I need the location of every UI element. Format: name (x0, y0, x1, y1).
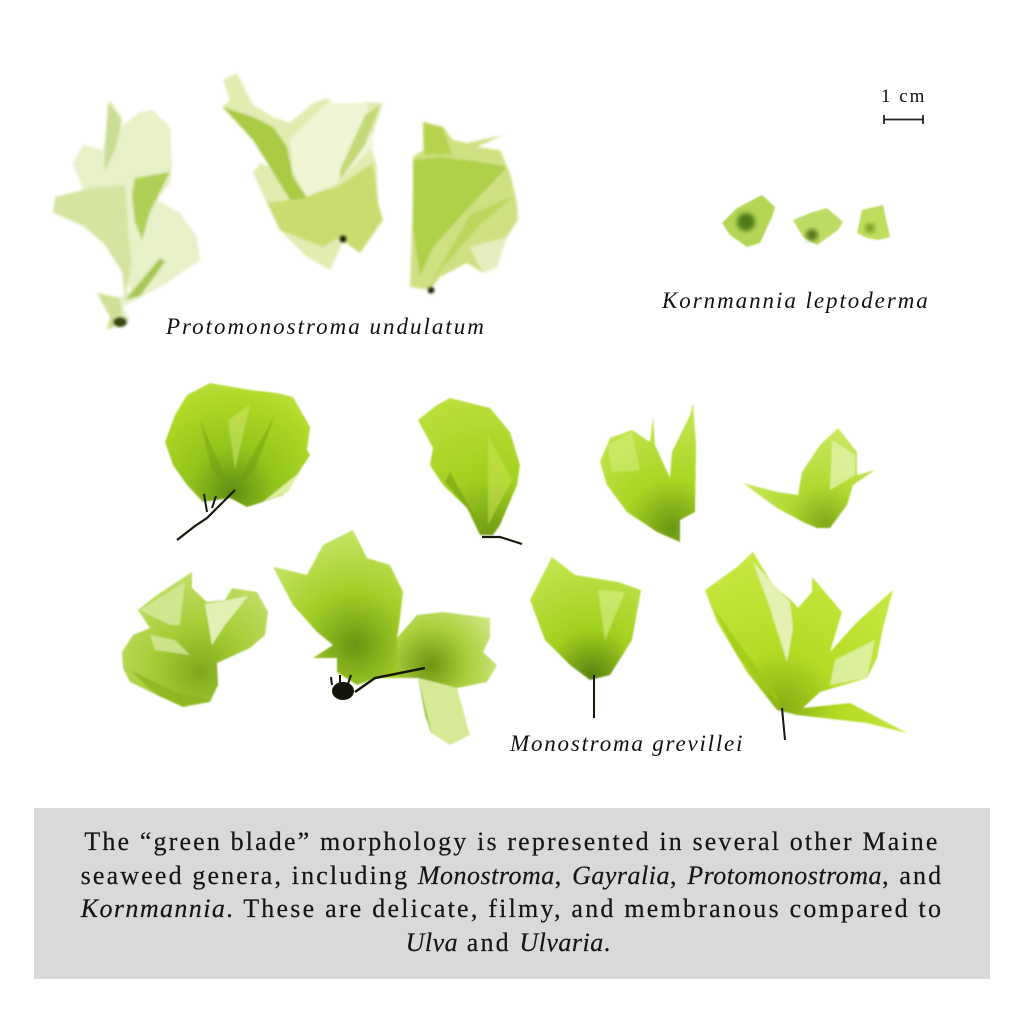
blade 7 (530, 557, 641, 680)
caption panel background (34, 808, 990, 979)
caption text: Ulva and Ulvaria. (406, 928, 612, 956)
blade 8 (705, 552, 907, 733)
caption text: Kornmannia. These are delicate, filmy, and membranous compared to (81, 894, 943, 923)
scale bar: 1 cm (881, 86, 926, 107)
blade 6 (273, 530, 497, 745)
tuft 3 (857, 205, 890, 240)
label: Monostroma grevillei: Monostroma grevillei (509, 731, 744, 756)
caption text: The “green blade” morphology is represented in several other Maine (84, 827, 940, 856)
blade 4 (743, 428, 875, 528)
blade 1 (165, 383, 310, 507)
label: Protomonostroma undulatum: Protomonostroma undulatum (165, 314, 486, 339)
caption text (80, 827, 943, 956)
scale bar (881, 86, 926, 124)
tuft 1 (722, 195, 775, 247)
specimens illustration (52, 72, 930, 756)
blade 2 (418, 398, 520, 535)
blade 1 (53, 100, 200, 330)
specimens: Protomonostroma undulatum (53, 73, 518, 330)
specimens: Kornmannia leptoderma (722, 195, 890, 247)
caption text: seaweed genera, including Monostroma, Gayralia, Protomonostroma, and (81, 860, 943, 890)
blade 3 (600, 403, 696, 542)
holdfasts and stipes (177, 490, 785, 740)
tuft 2 (793, 208, 843, 245)
blade 3 (410, 122, 518, 294)
blade 5 (122, 572, 268, 707)
label: Kornmannia leptoderma: Kornmannia leptoderma (661, 288, 930, 313)
specimens: Monostroma grevillei (122, 383, 907, 745)
blade 2 (222, 73, 383, 270)
